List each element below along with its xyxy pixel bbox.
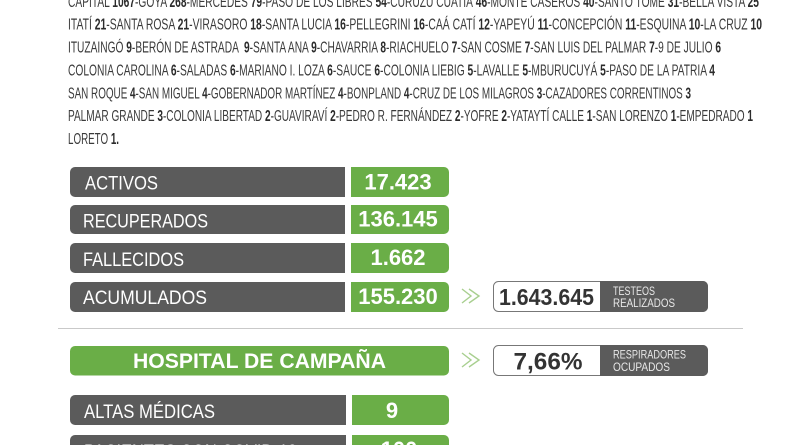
callout: testeos realizados: REALIZADOS xyxy=(613,296,675,310)
row: fallecidos xyxy=(70,243,449,273)
row: activos: 17.423 xyxy=(364,170,432,194)
callout: respiradores ocupados: OCUPADOS xyxy=(613,360,670,374)
callout: testeos realizados xyxy=(494,281,708,312)
text block: cases by locality: ITUZAINGÓ 9-BERÓN DE ASTRADA 9-SANTA ANA 9-CHAVARRIA 8-RIACHUELO 7-SAN COSME 7-SAN LUIS DEL PALMAR 7-9 DE JULIO 6 xyxy=(68,40,721,56)
heading: hospital de campaña: HOSPITAL DE CAMPAÑA xyxy=(133,350,386,373)
icon: double chevron testeos xyxy=(462,289,479,303)
row: fallecidos: FALLECIDOS xyxy=(83,250,184,271)
divider xyxy=(58,328,743,329)
heading: hospital de campaña xyxy=(70,346,449,376)
callout: respiradores ocupados: 7,66% xyxy=(514,348,582,376)
row: acumulados: 155.230 xyxy=(358,284,438,309)
row: pacientes con covid-19 xyxy=(70,435,449,445)
row: fallecidos: 1.662 xyxy=(370,245,426,270)
callout: respiradores ocupados xyxy=(494,345,708,376)
text block: cases by locality: COLONIA CAROLINA 6-SALADAS 6-MARIANO I. LOZA 6-SAUCE 6-COLONIA LIEBIG 5-LAVALLE 5-MBURUCUYÁ 5-PASO DE LA PATRIA 4 xyxy=(68,62,715,80)
row: recuperados: RECUPERADOS xyxy=(83,212,208,232)
row: acumulados xyxy=(70,282,449,312)
icon: double chevron respiradores xyxy=(462,353,479,367)
row: recuperados xyxy=(70,205,449,234)
row: activos xyxy=(70,167,449,197)
text block: cases by locality xyxy=(68,0,762,148)
callout: respiradores ocupados: RESPIRADORES xyxy=(613,348,686,362)
row: recuperados: 136.145 xyxy=(358,206,438,232)
callout: testeos realizados: TESTEOS xyxy=(613,284,655,298)
row: acumulados: ACUMULADOS xyxy=(83,288,207,309)
row: altas médicas: 9 xyxy=(386,398,398,423)
row: altas médicas xyxy=(70,395,449,425)
row: altas médicas: ALTAS MÉDICAS xyxy=(84,402,215,423)
callout: testeos realizados: 1.643.645 xyxy=(499,284,594,310)
text block: cases by locality: ITATÍ 21-SANTA ROSA 21-VIRASORO 18-SANTA LUCIA 16-PELLEGRINI 16-CAÁ CATÍ 12-YAPEYÚ 11-CONCEPCIÓN 11-ESQUINA 10-LA CRUZ 10 xyxy=(68,16,762,34)
text block: cases by locality: PALMAR GRANDE 3-COLONIA LIBERTAD 2-GUAVIRAVÍ 2-PEDRO R. FERNÁNDEZ 2-YOFRE 2-YATAYTÍ CALLE 1-SAN LORENZO 1-EMPEDRADO 1 xyxy=(68,108,753,125)
text block: cases by locality: LORETO 1. xyxy=(68,131,119,148)
text block: cases by locality: SAN ROQUE 4-SAN MIGUEL 4-GOBERNADOR MARTÍNEZ 4-BONPLAND 4-CRUZ DE LOS MILAGROS 3-CAZADORES CORRENTINOS 3 xyxy=(68,86,691,102)
row: activos: ACTIVOS xyxy=(85,174,158,194)
